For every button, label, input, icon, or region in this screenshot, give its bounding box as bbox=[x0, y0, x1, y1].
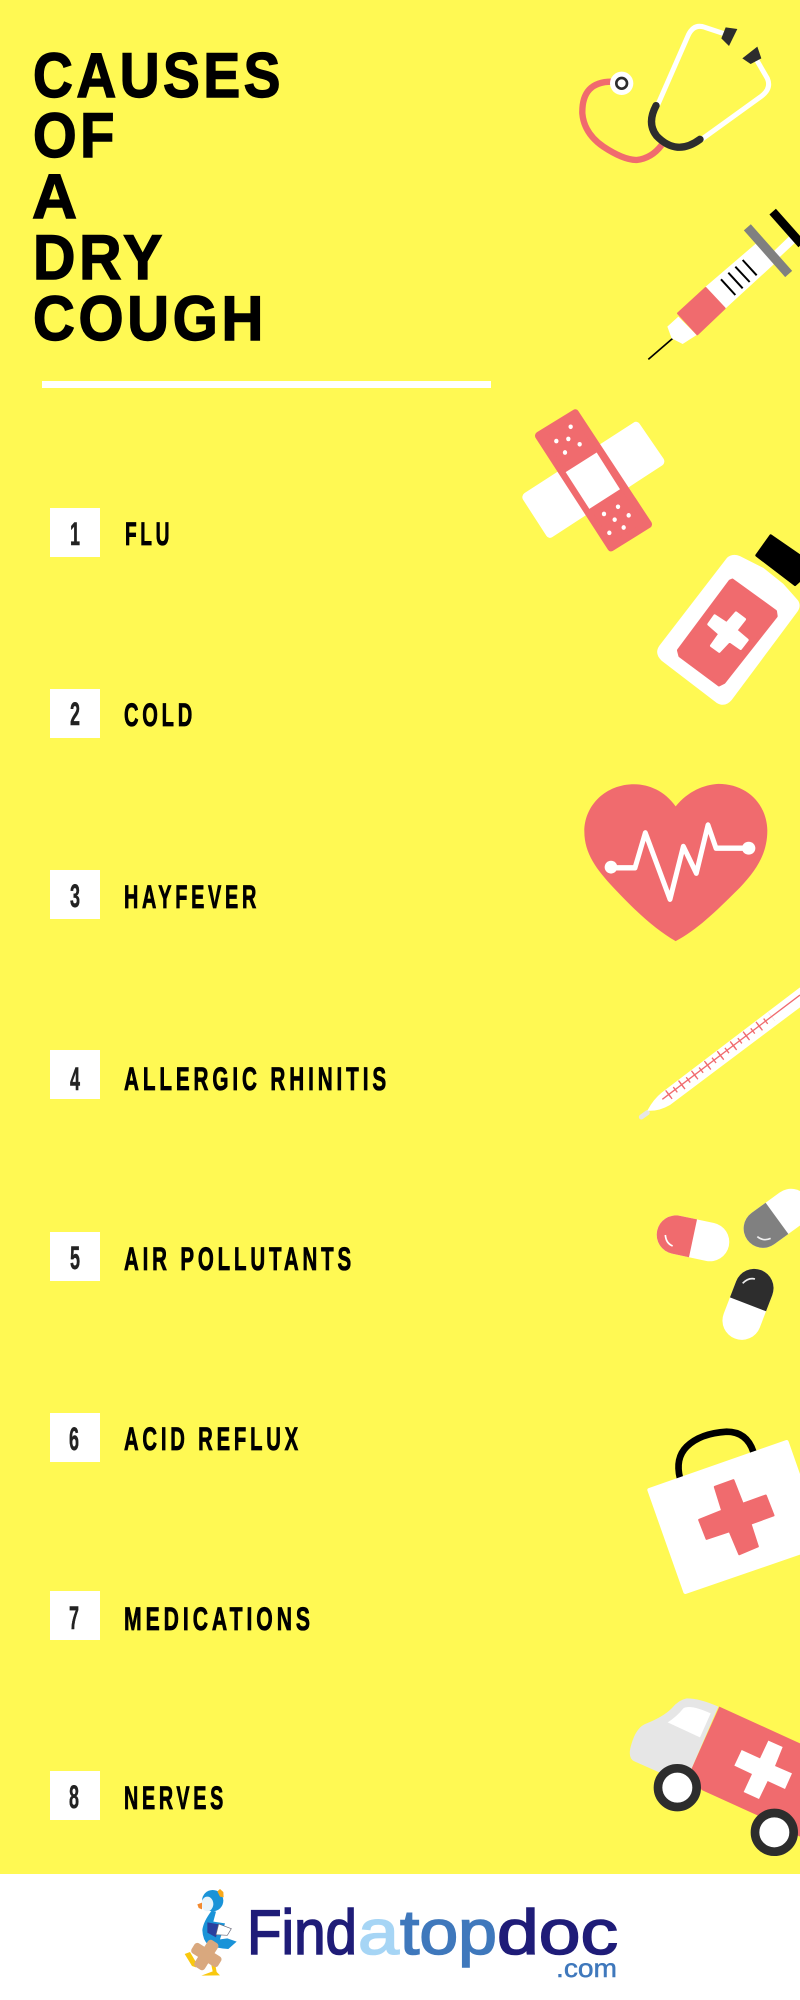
list item 3: hayfever: HAYFEVER bbox=[124, 879, 260, 915]
icon: stethoscope bbox=[582, 26, 769, 160]
list item 7: medications: MEDICATIONS bbox=[124, 1601, 314, 1637]
list item 6: acid reflux: 6 bbox=[69, 1421, 79, 1457]
list item 2: cold: COLD bbox=[124, 697, 196, 733]
title: A bbox=[32, 162, 81, 232]
list item 5: air pollutants: AIR POLLUTANTS bbox=[124, 1241, 355, 1277]
list item 8: nerves: 8 bbox=[69, 1779, 79, 1815]
icon: heart with pulse bbox=[584, 784, 767, 941]
title: COUGH bbox=[33, 284, 267, 354]
icon: grey pill bbox=[736, 1181, 800, 1256]
logo wordmark: doc bbox=[497, 1898, 618, 1968]
list item 7: medications bbox=[50, 1591, 314, 1640]
logo wordmark: a bbox=[358, 1898, 400, 1968]
list item 6: acid reflux: ACID REFLUX bbox=[124, 1421, 302, 1457]
logo wordmark: Find bbox=[247, 1898, 357, 1968]
title bbox=[32, 41, 284, 354]
icon: thermometer bbox=[641, 987, 800, 1117]
icon: red pill bbox=[653, 1212, 733, 1265]
list item 2: cold: 2 bbox=[70, 696, 80, 732]
logo wordmark: top bbox=[400, 1898, 497, 1968]
icon: black pill bbox=[717, 1263, 779, 1345]
list item 7: medications: 7 bbox=[69, 1600, 79, 1636]
logo wordmark: .com bbox=[556, 1953, 617, 1983]
list item 1: flu: 1 bbox=[70, 516, 80, 552]
title: CAUSES bbox=[33, 41, 284, 111]
list item 3: hayfever: 3 bbox=[70, 878, 80, 914]
icon: duck mascot bbox=[185, 1889, 237, 1976]
list item 5: air pollutants bbox=[50, 1232, 355, 1281]
list item 3: hayfever bbox=[50, 870, 260, 919]
list item 6: acid reflux bbox=[50, 1413, 302, 1462]
list item 2: cold bbox=[50, 689, 196, 738]
list item 4: allergic rhinitis: ALLERGIC RHINITIS bbox=[124, 1061, 390, 1097]
footer panel bbox=[0, 1874, 800, 2000]
icon: syringe bbox=[648, 212, 800, 359]
list item 8: nerves: NERVES bbox=[124, 1780, 227, 1816]
icon: ambulance bbox=[630, 1698, 800, 1852]
list item 4: allergic rhinitis: 4 bbox=[70, 1061, 80, 1097]
icon: bandage bbox=[527, 413, 660, 547]
title: OF bbox=[33, 101, 118, 171]
list item 1: flu: FLU bbox=[125, 516, 173, 552]
logo wordmark bbox=[247, 1898, 618, 1983]
list item 4: allergic rhinitis bbox=[50, 1050, 390, 1099]
title: DRY bbox=[33, 223, 166, 293]
list item 5: air pollutants: 5 bbox=[70, 1240, 80, 1276]
title underline bbox=[42, 381, 491, 388]
icon: first aid kit bbox=[649, 1432, 800, 1592]
list item 1: flu bbox=[50, 508, 173, 557]
list item 8: nerves bbox=[50, 1771, 227, 1820]
icon: medicine bottle bbox=[657, 536, 800, 705]
